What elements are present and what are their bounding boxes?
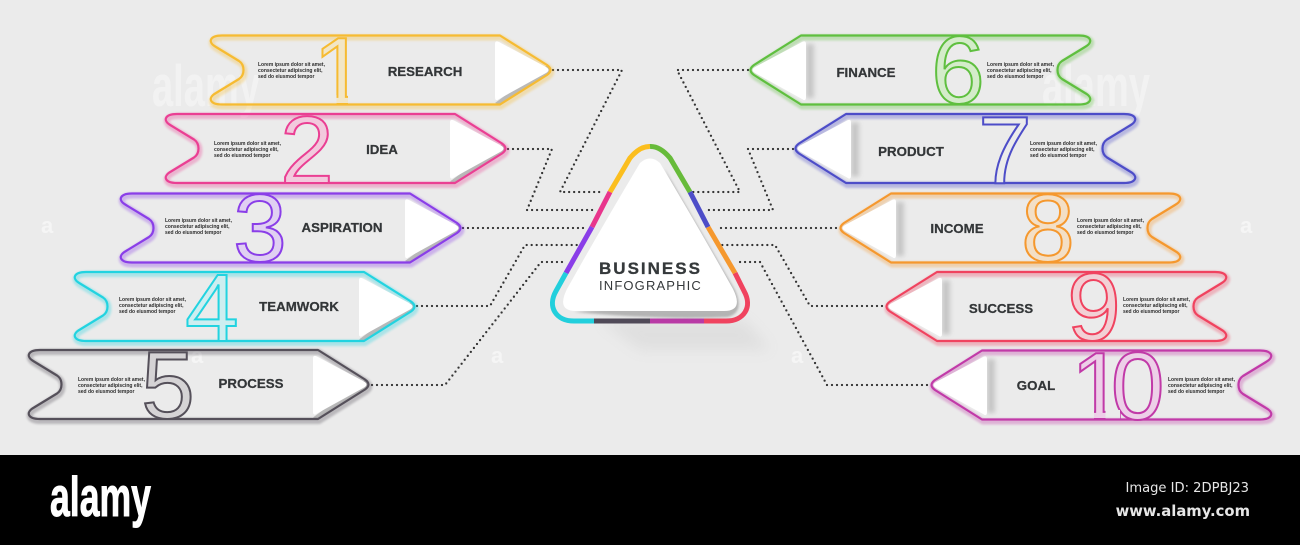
ribbon 8: income xyxy=(840,175,1181,282)
description: sed do eiusmod tempor xyxy=(119,309,175,315)
white triangle xyxy=(563,158,737,311)
number 6: 6 xyxy=(931,17,985,124)
number 5: 5 xyxy=(141,332,195,439)
ribbon 9: success xyxy=(886,254,1227,361)
watermarks: a xyxy=(191,343,204,368)
label: RESEARCH xyxy=(388,64,462,79)
center triangle xyxy=(552,146,770,350)
ribbon 4: teamwork xyxy=(75,255,416,362)
alamy logo: alamy xyxy=(50,465,151,528)
BUSINESS heading: BUSINESS xyxy=(599,259,702,278)
description: consectetur adipiscing elit, xyxy=(1168,383,1233,389)
ribbon 3: aspiration xyxy=(121,175,462,282)
dotted connector lines xyxy=(372,70,927,385)
ribbon 5: process xyxy=(29,332,370,439)
label: TEAMWORK xyxy=(259,299,339,314)
description: consectetur adipiscing elit, xyxy=(1123,303,1188,309)
description: Lorem ipsum dolor sit amet, xyxy=(1123,297,1191,303)
description: consectetur adipiscing elit, xyxy=(258,68,323,74)
number 9: 9 xyxy=(1067,254,1121,361)
description: sed do eiusmod tempor xyxy=(1077,230,1133,236)
number 3: 3 xyxy=(233,175,287,282)
description: Lorem ipsum dolor sit amet, xyxy=(78,377,146,383)
number 4: 4 xyxy=(185,255,239,362)
description: consectetur adipiscing elit, xyxy=(987,68,1052,74)
description: sed do eiusmod tempor xyxy=(1168,389,1224,395)
ribbon 10: goal xyxy=(928,348,1276,426)
ribbon 6: finance xyxy=(750,17,1091,124)
number 7: 7 xyxy=(978,97,1032,204)
ribbon 2: idea xyxy=(166,97,506,204)
label: INCOME xyxy=(930,221,984,236)
description: Lorem ipsum dolor sit amet, xyxy=(258,62,326,68)
label: GOAL xyxy=(1017,378,1055,393)
description: sed do eiusmod tempor xyxy=(987,74,1043,80)
description: Lorem ipsum dolor sit amet, xyxy=(1077,218,1145,224)
triangle ring xyxy=(552,146,748,321)
label: PROCESS xyxy=(218,376,284,391)
description: consectetur adipiscing elit, xyxy=(214,147,279,153)
number 2: 2 xyxy=(280,97,334,204)
description: Lorem ipsum dolor sit amet, xyxy=(119,297,187,303)
ribbon 1: research xyxy=(208,34,556,110)
number 8: 8 xyxy=(1021,175,1075,282)
label: PRODUCT xyxy=(878,144,944,159)
description: sed do eiusmod tempor xyxy=(214,153,270,159)
description: Lorem ipsum dolor sit amet, xyxy=(1030,141,1098,147)
description: Lorem ipsum dolor sit amet, xyxy=(165,218,233,224)
description: sed do eiusmod tempor xyxy=(78,389,134,395)
footer bar xyxy=(0,455,1300,545)
label: ASPIRATION xyxy=(301,220,383,235)
description: sed do eiusmod tempor xyxy=(258,74,314,80)
label: IDEA xyxy=(366,142,398,157)
watermarks xyxy=(41,54,1253,368)
description: Lorem ipsum dolor sit amet, xyxy=(987,62,1055,68)
triangle cast shadow xyxy=(600,320,770,350)
description: consectetur adipiscing elit, xyxy=(1077,224,1142,230)
description: consectetur adipiscing elit, xyxy=(119,303,184,309)
description: sed do eiusmod tempor xyxy=(1123,309,1179,315)
label: SUCCESS xyxy=(969,301,1033,316)
watermarks: a xyxy=(41,213,54,238)
watermarks: a xyxy=(491,343,504,368)
watermarks: alamy xyxy=(152,54,260,119)
number 1: 1 xyxy=(313,18,367,125)
label: FINANCE xyxy=(836,65,896,80)
watermarks: alamy xyxy=(1042,54,1150,119)
watermarks: a xyxy=(1091,343,1104,368)
triangle inner shadow xyxy=(574,168,739,318)
description: Lorem ipsum dolor sit amet, xyxy=(214,141,282,147)
ribbon 7: product xyxy=(796,97,1136,204)
description: sed do eiusmod tempor xyxy=(1030,153,1086,159)
description: sed do eiusmod tempor xyxy=(165,230,221,236)
image id: Image ID: 2DPBJ23 xyxy=(1125,481,1249,496)
description: consectetur adipiscing elit, xyxy=(165,224,230,230)
watermarks: a xyxy=(1240,213,1253,238)
description: consectetur adipiscing elit, xyxy=(1030,147,1095,153)
INFOGRAPHIC subheading: INFOGRAPHIC xyxy=(599,278,702,293)
description: Lorem ipsum dolor sit amet, xyxy=(1168,377,1236,383)
number 10: 10 xyxy=(1071,333,1164,440)
description: consectetur adipiscing elit, xyxy=(78,383,143,389)
watermarks: a xyxy=(791,343,804,368)
website: www.alamy.com xyxy=(1116,503,1250,520)
